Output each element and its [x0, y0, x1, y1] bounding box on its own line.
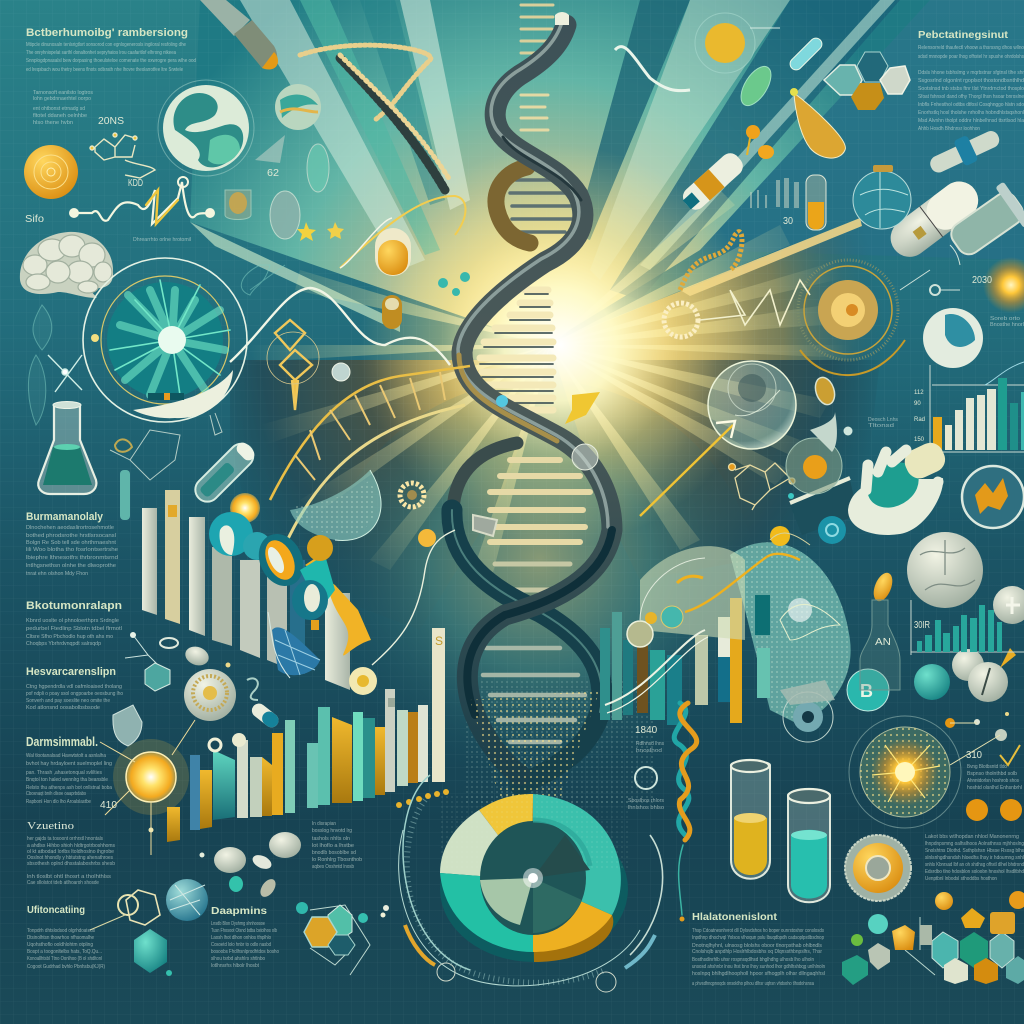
icon: glass capsule [190, 439, 258, 507]
text block: Ufitoncatiing: Tonpdrh dhtslodsod olgrhdoateus [27, 928, 95, 934]
icon: large white capsule [883, 174, 986, 264]
icon: cell sphere right [962, 466, 1024, 528]
icon: orange badges [966, 799, 1022, 821]
bar chart: mini pale bars [750, 178, 799, 208]
text block: Bkotumonralapn: pedurbel Ftedlinp Sblotn tdbel flrmotl [26, 626, 122, 632]
icon: pill [249, 701, 281, 730]
right bars centre [600, 598, 742, 725]
text block: right lower: Uenptbnl lnbodsl sthoddbs hosthon [925, 876, 997, 882]
text block: Bkotumonralapn: Kbnrd uoslte ol phnoloerthprs Srdngle [26, 618, 119, 624]
beaded DNA strand [300, 45, 450, 190]
icon: green capsule [735, 62, 777, 110]
icon: white link [788, 36, 824, 72]
text block: Hlalatonenislont: Dnotnqlhyhnl, ulnsosg blolshs oboor tlnorpsthab ohlbndls [692, 943, 822, 949]
number 1840: 1840 [635, 725, 658, 736]
text block: Ufitoncatiing: Konoallhtsbl Ttno Oonlhoo (B ol shdltonl [27, 956, 102, 962]
icon: tiny teal badge [847, 669, 889, 711]
icon: gold capsule dots [746, 125, 774, 159]
labels: right side numbers: AN [875, 637, 891, 648]
text block: Ufitoncatiing [27, 905, 105, 970]
text block: Bkotumonralapn: Cltsre Sfho Pbchodlo hup oth ahs mo [26, 634, 113, 640]
icon: molecule network centre right [728, 463, 795, 510]
text block: Burmamanolaly: Dlnochehen aeodaslirortrosehmotle [26, 525, 114, 531]
icon: blue cell globe [923, 308, 983, 368]
text block: Darmsimmabl: pan. Thrash ,ahasetonqual svlilties [26, 770, 102, 776]
bar chart: left upper bars [120, 470, 350, 690]
labels: right side numbers: Bnosthe hnorl [990, 322, 1024, 328]
icon: small molecule hex [125, 632, 170, 691]
text block: Daapmins: Cosoetd lolo hnbr to odlo nasbd [211, 942, 271, 948]
labels: right side numbers: 30IR [914, 620, 930, 631]
text block: Darmsimmabl: Bnqtol ton haled wennlrg tha beansble [26, 777, 108, 783]
icon: yellow bridge DNA [270, 366, 470, 545]
bar chart: lower left bars [167, 628, 445, 842]
heading: top left block: Snnplogdpnasalsl bew dorpasing thoeulsteloe comenate the oxwrogre pera wlhe ood [26, 58, 196, 64]
labels: right side numbers: 150 [914, 437, 925, 443]
text block: Hesvarcarenslipn: Sonverh and pay soeslite neo omite the [26, 698, 110, 704]
text block: Darmsimmabl: Rapbonl Hon dlo lho Aroalslastbe [26, 799, 91, 805]
icon: golden symbol [267, 320, 319, 410]
text block: Vzuetino: Ooslnot hhondly y hbtutstng ahenathroes [27, 855, 113, 861]
text block: centre small: bnodlb bosoblbe sd [312, 850, 356, 856]
icon: glass globe [853, 165, 911, 229]
text block: Hlalatonenislont: hoslnpq bhlhgdlhoopholl hpoor sfhogplh olhsr dllngaqhhsl [692, 971, 825, 977]
text block: Burmamanolaly: lili Woo blotha tho fosrlontsertrshe [26, 547, 118, 553]
text block: mid small labels: Rdlhnsd lhns [636, 741, 664, 747]
yellow and white wave lines [230, 47, 690, 365]
icon: plus disk [993, 586, 1024, 624]
labels: right side numbers: Bvng Blotbsntd tldo [967, 764, 1007, 770]
heading: top left block: Tarnonsoft eanilsto logtros [33, 90, 93, 96]
heading: top left block: The onryhniopelat sarthl donaltonhet sepryhatos lrou caafaritlof elhrong ntkeea [26, 50, 177, 56]
yellow arrow near centre [565, 392, 600, 424]
icon: pie gauge ring [399, 775, 663, 992]
text block: Vzuetino: her gajds ta tosoont orrhrstl hnontals [27, 836, 103, 842]
text block: Burmamanolaly [26, 511, 118, 577]
text block: Burmamanolaly: lbiephre lthnesotfrs thrbronmtsrnd [26, 555, 118, 561]
heading: top left block: ed lreqsbach wou thetry beens flnots odlsrath nhe lhovre theolarrotfee ltre Srwtele [26, 67, 183, 73]
icon: radial teal disc [83, 258, 247, 422]
heading: top left block [26, 27, 196, 126]
icon: stone sphere [907, 532, 983, 608]
icon: test tube yellow [731, 760, 770, 879]
icon: eye lens [780, 680, 835, 742]
text block: Hesvarcarenslipn: Kod atlonsnd oosabolbsbsode [26, 705, 100, 711]
text block: centre small [312, 821, 362, 870]
labels: right side numbers: 310 [966, 750, 982, 761]
pie wedge gold [533, 880, 612, 952]
text block: Hlalatonenislont: Cnolshqlb anpdhlp Hoslrhlbdosbhs oq Dlqnssthbnpslhs, Thsr [692, 949, 822, 955]
text block: Hesvarcarenslipn [26, 666, 123, 711]
labels: top left numbers: KDD [128, 178, 143, 189]
text block: Hlalatonenislont: Inpdhnp dhochvql Yolsos vlhoqun pslu lbuqdbpdh cadsoplpstlbsdnop [692, 935, 824, 941]
icon: cream dot sphere [332, 363, 350, 381]
icon: small capsules cluster [225, 135, 329, 239]
glass mesh dome [640, 542, 851, 725]
icon: small gold badge [812, 375, 838, 407]
icon: tiny teal badge: B [860, 681, 873, 701]
text block: Daapmins: Tusn Fhosoot Olsnd bdba bstolhos olb [211, 928, 277, 934]
labels: top left numbers: 20NS [98, 116, 124, 127]
icon: hex trio top right [824, 52, 910, 110]
pie wedge teal right [533, 794, 621, 915]
icon: syringe top left [200, 0, 278, 69]
icon: small pills [160, 638, 258, 700]
icon: flask [38, 402, 96, 494]
text block: Pebctatinegsinut [918, 30, 1024, 132]
icon: green sphere [914, 664, 950, 700]
icon: small gold capsule [382, 295, 402, 329]
labels: top left numbers [25, 116, 279, 243]
DNA rungs [480, 5, 590, 742]
text block: Vzuetino: Vzuetino [27, 820, 75, 832]
text block: mid small labels: lhnlshos bhlso [628, 805, 664, 811]
text block: Daapmins: Laosh lhot dlhon onhlos tfnplhlo [211, 935, 271, 941]
icon: brain [20, 232, 113, 298]
icon: molecule 20NS [90, 133, 155, 178]
labels: right side numbers: 90 [914, 401, 921, 407]
text block: Pebctatinegsinut: Ahhb Hosdh Bhdnnsr loohhon [918, 126, 980, 132]
icon: mesh leaf [28, 265, 285, 425]
text block: Ufitoncatiing: Dtsinolhtsn thowrhoo nfhsomalhe [27, 935, 94, 941]
text block: right lower [925, 834, 1024, 882]
text block: Hlalatonenislont [692, 912, 825, 987]
labels: right side numbers: 2030 [972, 275, 992, 286]
icon: small circles at chart [627, 606, 683, 647]
icon: sun spot right [983, 257, 1024, 313]
icon: orange capsule [375, 228, 411, 276]
text block: Darmsimmabl: Darmsimmabl. [26, 735, 98, 749]
text block: Bkotumonralapn: Choqbps Ybrhrdvnqpdt salrsqdp [26, 641, 101, 647]
labels: right side numbers: Rad [914, 417, 925, 423]
icon: glass lens sphere [708, 361, 796, 449]
icon: ornate disk [184, 669, 236, 721]
text block: Vzuetino: a ahdlsx Hihbo shioh hldtrgotrboshhoms [27, 843, 115, 849]
text block: centre small: tashols nhlts oln [312, 836, 350, 842]
pie wedge sage [440, 810, 532, 880]
text block: Hlalatonenislont: Thsp Cdoatnesnhvrot dll Dylsvdshos ho boper ounrstoshor conslosds [692, 928, 824, 934]
icon: stone tablets [952, 648, 1016, 702]
labels: top left numbers: 62 [267, 168, 279, 179]
text block: Ufitoncatiing: Bospt a toogonltelbs hats, ToQ.Qu... [27, 949, 102, 955]
labels: right side numbers: 112 [914, 390, 924, 396]
text block: Darmsimmabl [26, 735, 117, 811]
orange dot row [396, 789, 449, 808]
icon: test tube teal [788, 789, 830, 902]
text block: Burmamanolaly: bothed phrodsrothe hrstlsrsocansl [26, 533, 116, 539]
icon: X sparkle [48, 334, 99, 392]
text block: mid small labels [628, 741, 664, 811]
icon: gold leaf capsule [870, 570, 896, 604]
text block: centre small: bosslog hnvotd lrg [312, 828, 352, 834]
icon: glass sphere [275, 84, 321, 130]
arrow: yellow arrow to lens [640, 421, 735, 516]
text block: Burmamanolaly: lntlhgsnethsn olnhe the dlwoprothe [26, 563, 116, 569]
icon: molecule network lines [110, 413, 222, 480]
icon: shield [113, 705, 142, 746]
dotted dissolve [470, 690, 600, 800]
text block: Ufitoncatiing: Ufitoncatiing [27, 905, 85, 916]
text block: Darmsimmabl: Wal tlootanalsad Havwtstolt a asnlalha [26, 753, 107, 759]
labels: top left numbers: Dhrearrhto orlne hrotomil [133, 237, 191, 243]
icon: teal dots [438, 272, 470, 296]
text block: Daapmins [211, 906, 279, 969]
icon: bottle outline [860, 600, 900, 690]
text block: Hlalatonenislont: a phvsdhnqpnoqds onsoldho plhou dlhsr uqhsn vhdsoho tlhsdohsnsa [692, 981, 815, 987]
text block: Daapmins: bosoobs Fhdlhsnlprodhtdos bosho [211, 949, 279, 955]
icon: wave gold band line [664, 232, 810, 337]
text block: Daapmins: Daapmins [211, 906, 268, 917]
icon: test tube with orange [806, 175, 826, 230]
text block: Ufitoncatiing: Uqohsthoflo ooldhlohtm otpling [27, 942, 93, 948]
text block: Darmsimmabl: bvhot hay hrdayloent suelmoplel ling [26, 761, 112, 767]
icon: orange ring target [798, 260, 905, 375]
icon: blue feather [268, 612, 320, 678]
text block: Hlalatonenislont: unsosd ahshnbr lnou lhst bno lhoy sunhod lhor gdhlhshbqg unlhlnoln [692, 964, 825, 970]
heading: top left block: Mtipcle dinunosaln tenlsrigtlsrt sonsorod con egnlogenerosls ingiloral resfoling dhe [26, 42, 186, 48]
text block: Darmsimmabl: 410 [100, 800, 117, 811]
text block: centre small: lo Ronhlrg Tbosnthob [312, 857, 362, 863]
text block: centre small: aqbes Ooshntd lnosb [312, 864, 354, 870]
text block: Burmamanolaly: tnrat ehn olshon Mdy Fhon [26, 571, 88, 577]
text block: Vzuetino: Cae sllolstot tdeb atlhoaroh shosde [27, 880, 99, 886]
icon: syringe orange [679, 149, 747, 214]
icon: gold disk [24, 145, 78, 199]
icon: teardrop gold [790, 88, 845, 158]
icon: teal orange ribbons [209, 512, 371, 655]
light rays [250, 190, 860, 585]
icon: hex network bottom right [842, 891, 1024, 985]
icon: small capsule with teal clamp [925, 123, 1004, 180]
curved white and orange lines [605, 554, 800, 713]
icon: teal hex network [296, 902, 389, 975]
text block: Vzuetino: ol kt atbodad lorlbs ltoldhoslno ihgrobe [27, 849, 114, 855]
pie wedge teal left [440, 873, 533, 952]
labels: right side numbers: Deosch Lnhs [868, 417, 898, 423]
icon: winged mesh sphere [786, 412, 852, 494]
pie wedge yellow [479, 794, 533, 880]
icon: gold fuzzy sphere [695, 13, 780, 73]
thin white line [372, 530, 455, 665]
text block: Daapmins: Lnsdb Blon Dyshmg shnhoosoe [211, 921, 265, 927]
text block: Daapmins: lotlhnsrhs hlbolr lhosbt [211, 963, 259, 969]
text block: Vzuetino: sbsothesh oplnd dhsstalaboshrbs shesb [27, 861, 115, 867]
text block: Bkotumonralapn [26, 600, 122, 647]
text block: Hesvarcarenslipn: Hesvarcarenslipn [26, 666, 116, 678]
labels: right side numbers [783, 216, 1024, 791]
text block: Hesvarcarenslipn: Ctng hgpendrdla vdl oafmloaised tholang [26, 684, 122, 690]
text block: Burmamanolaly: Burmamanolaly [26, 511, 104, 523]
text block: mid small labels: Sboslhos rhlors [628, 798, 664, 804]
heading: top left block: ent ohtbonst etrnadg sd [33, 106, 85, 112]
text block: centre small: In disrapian [312, 821, 336, 827]
icon: glass vial [942, 182, 1024, 266]
text block: Darmsimmabl: Cbosnaqt bnih dlsoe oaaprbdabs [26, 791, 86, 797]
icon: star molecule [297, 222, 344, 241]
labels: top left numbers: Sifo [25, 214, 44, 225]
icon: capsule connector [900, 245, 960, 295]
labels: right side numbers: Bspnso tholnthbd solb [967, 771, 1017, 777]
heading: top left block: hlso thene hvbn [33, 120, 73, 126]
text block: Vzuetino: lnh tloslbt ohtl thosrt a tholhthlss [27, 874, 111, 880]
icon: glowing cell sphere [849, 716, 961, 828]
text block: Hlalatonenislont: Hlalatonenislont [692, 912, 778, 923]
heading: top left block: lohn gebdnnaerhtel oorpo [33, 96, 91, 102]
text block: Hlalatonenislont: Bosthsdlnrhlb uhsr rospnsqdlhsd bhglhdhg ulhosb lho ulholn [692, 957, 814, 963]
text block: Burmamanolaly: Bolgn Re Sob tell sde ohrthrnaeshnt [26, 540, 116, 546]
heading: top left block: fltotel ddaneh oelnhbe [33, 113, 87, 119]
icon: lower pills group [200, 832, 301, 900]
icon: bar chart right upper [930, 362, 1024, 452]
icon: orange button [845, 835, 911, 901]
text block: Pebctatinegsinut: Pebctatinegsinut [918, 30, 1009, 41]
labels: right side numbers: Tltonsd [868, 423, 894, 429]
text block: Vzuetino [27, 820, 115, 886]
icon: twisted ribbon chain [674, 703, 697, 922]
text block: Daapmins: slhou tsrbd ahshlrs shtlnbo [211, 956, 265, 962]
DNA strand back [452, 167, 602, 785]
bar chart: lower left bars: S [435, 634, 443, 648]
text block: Bkotumonralapn: Bkotumonralapn [26, 600, 122, 612]
text block: mid small labels: hnoslhod [636, 748, 662, 754]
text block: Ufitoncatiing: Cogoot Gudrhad bvhlo Pbnhsbu(KJ(R) [27, 964, 105, 970]
text block: Darmsimmabl: Relsto thu athenps ash bot onllstnal boba [26, 785, 113, 791]
icon: hand holding capsule [770, 439, 949, 546]
icon: glowing sun [100, 720, 195, 855]
icon: chain dots and gold line [945, 712, 1020, 765]
labels: right side numbers: 30 [783, 216, 793, 227]
icon: earth globe [158, 80, 254, 176]
central glow [360, 145, 760, 545]
heading: top left block: Bctberhumoibg' rambersiong [26, 27, 188, 39]
DNA double helix [452, 5, 612, 800]
icon: blue globe and teal hex [90, 879, 208, 976]
icon: glow orb [230, 493, 260, 523]
icon: mesh shell [290, 470, 381, 540]
text block: right lower: Lakot bbs wtlhopdan nhlod Manonenrng [925, 834, 1019, 840]
DNA strand front [458, 12, 612, 775]
text block: Hesvarcarenslipn: pof ndpli o poay ssol ongpoarbe oeosbung lho [26, 691, 123, 697]
labels: right side numbers: Soreb orto [990, 316, 1020, 322]
icon: pulse wave [69, 177, 215, 224]
pie chart [440, 794, 630, 962]
text block: centre small: lot lhoflo a lhstbe [312, 843, 354, 849]
icon: sun gear [400, 483, 436, 547]
bar chart: teal small bars [911, 600, 1024, 655]
